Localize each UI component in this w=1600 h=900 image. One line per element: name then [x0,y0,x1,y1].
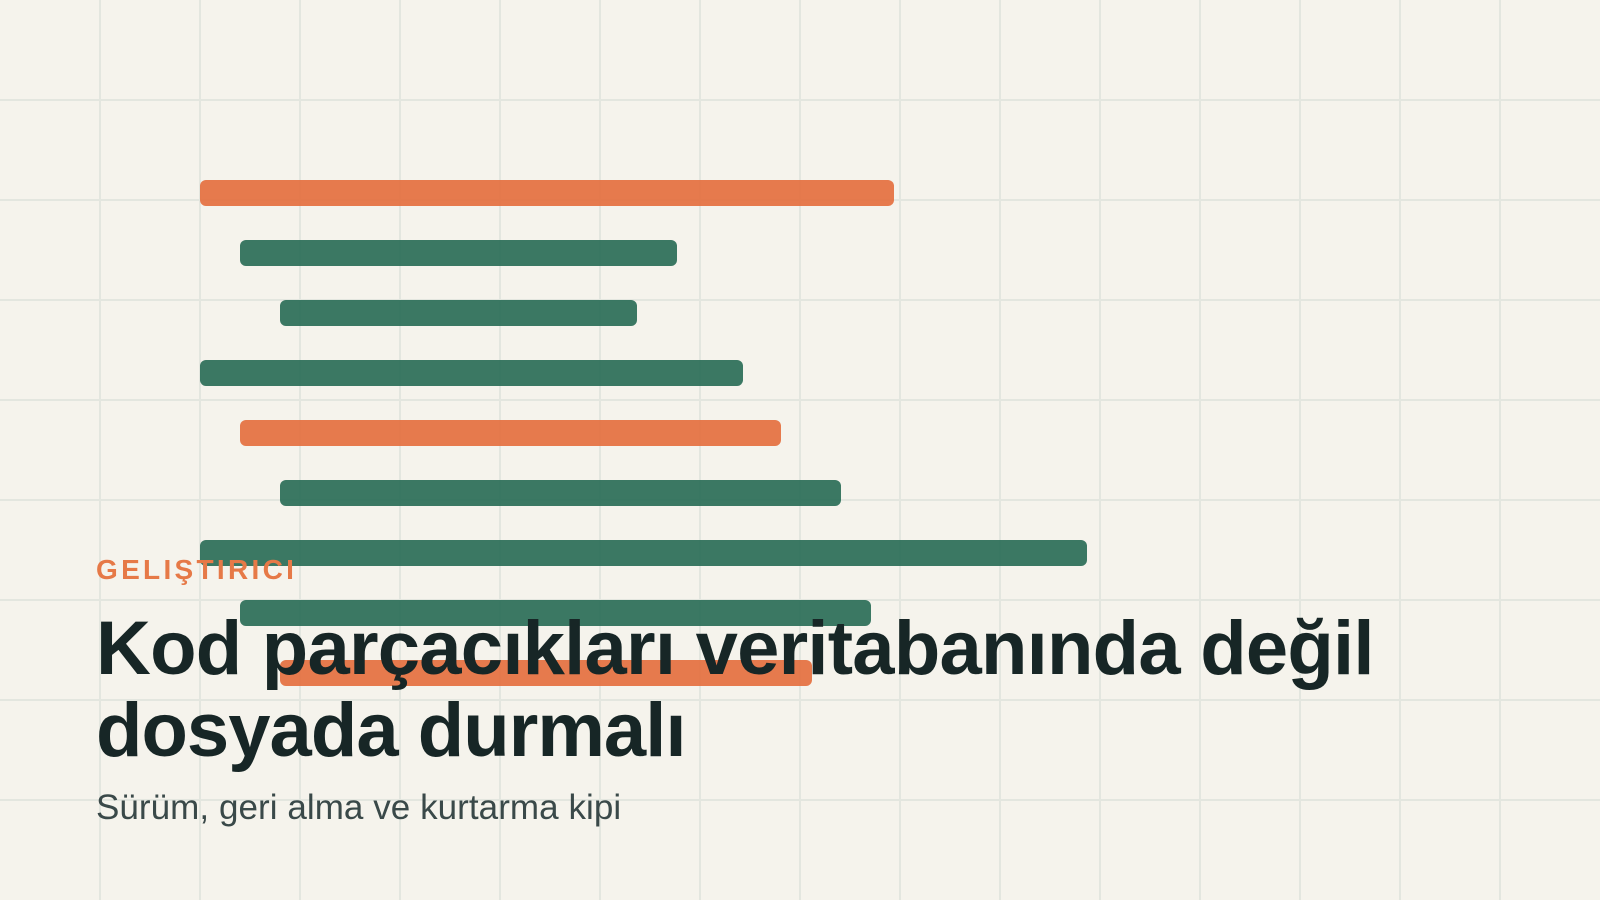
bar 5: orange [240,420,781,446]
title: Kod parçacıkları veritabanında değil [96,606,1374,691]
bar 9: orange [280,660,812,686]
bar 7: green [200,540,1087,566]
bar 8: green [240,600,871,626]
title [96,606,1374,773]
bar 6: green [280,480,841,506]
bar 2: green [240,240,677,266]
bar 4: green [200,360,743,386]
bar 1: orange [200,180,894,206]
bar chart: code snippet lines [200,180,1087,686]
subtitle: Sürüm, geri alma ve kurtarma kipi [96,788,621,827]
text block: title area [96,554,1374,827]
bar 3: green [280,300,637,326]
title: dosyada durmalı [96,688,686,773]
eyebrow label: GELIŞTIRICI [96,554,297,585]
